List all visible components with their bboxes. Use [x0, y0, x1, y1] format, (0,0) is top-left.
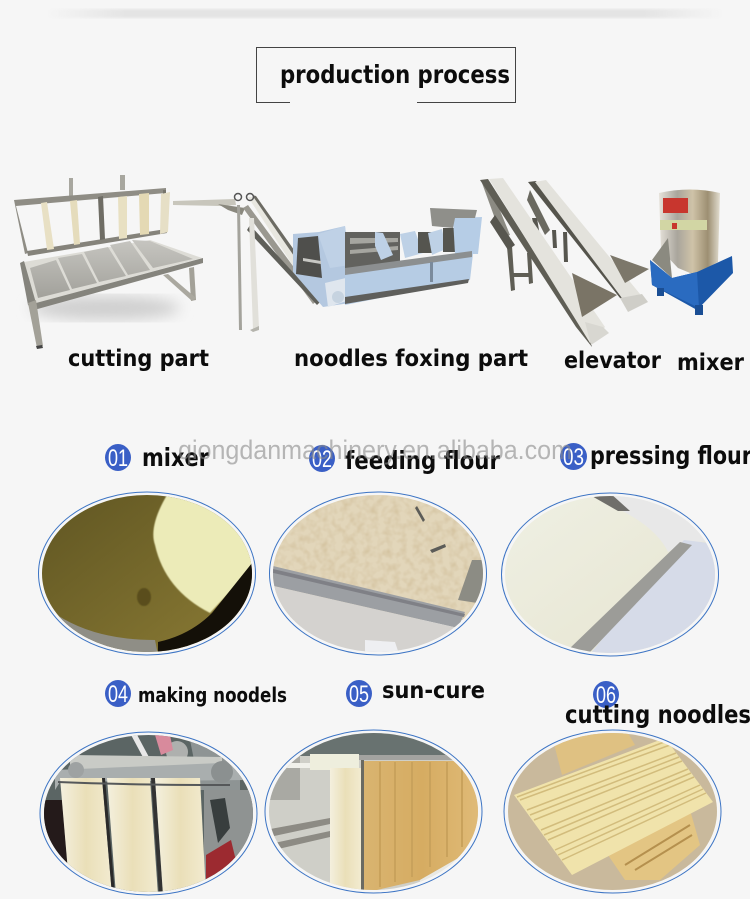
label: elevator: elevator	[564, 348, 662, 374]
photo 04: making noodles	[40, 730, 260, 899]
machine: elevator conveyors	[480, 178, 649, 347]
machine: mixer	[650, 190, 733, 315]
heading text: production process	[280, 60, 510, 89]
step 05 heading: sun-cure	[382, 678, 485, 704]
step 04 heading: making noodels	[138, 683, 287, 707]
watermark: qiongdanmachinery.en.alibaba.com	[178, 435, 572, 465]
step 01 heading	[105, 443, 210, 472]
photo 02: feeding flour	[269, 490, 490, 660]
photo 05: sun-cure	[265, 728, 485, 898]
step 01 heading: mixer	[142, 443, 210, 472]
machine: noodle conveyor	[173, 194, 328, 332]
machine: noodles forming line	[293, 208, 482, 307]
step 02 heading: feeding flour	[345, 446, 501, 475]
step 04 heading	[105, 680, 287, 708]
label: cutting part: cutting part	[68, 346, 209, 372]
top shadow bar	[45, 9, 725, 18]
photo 01: mixer dough	[38, 490, 258, 660]
step 04 heading: 04	[108, 681, 128, 708]
machine: cutting part rack	[14, 175, 203, 349]
step 06 heading	[565, 681, 750, 729]
step 02 heading: 02	[312, 446, 332, 473]
photo 06: cutting noodles	[504, 728, 724, 898]
step 02 heading	[309, 445, 501, 475]
title box: production process	[256, 48, 516, 102]
step 03 heading: 03	[563, 444, 584, 471]
step 05 heading: 05	[349, 681, 369, 708]
label: mixer: mixer	[677, 350, 745, 376]
step 06 heading: 06	[596, 682, 616, 709]
label: noodles foxing part: noodles foxing part	[294, 346, 528, 372]
step 01 heading: 01	[108, 445, 128, 472]
photo 03: pressing flour	[500, 490, 725, 660]
step 05 heading	[346, 678, 485, 708]
